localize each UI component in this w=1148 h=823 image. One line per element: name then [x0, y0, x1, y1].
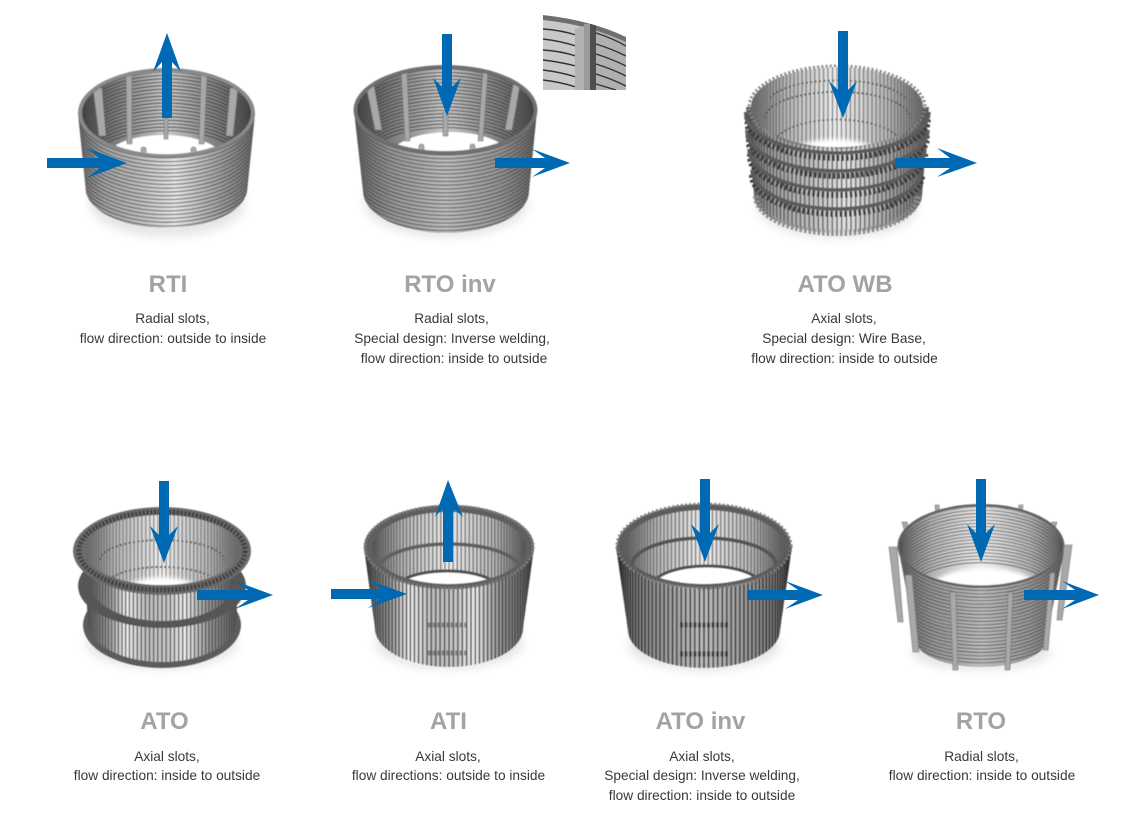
description: ATO inv: Special design: Inverse welding,	[604, 768, 800, 783]
panel: ATO	[72, 481, 273, 780]
description: ATO inv: flow direction: inside to outside	[609, 788, 795, 803]
arrow: flow out to right	[197, 581, 273, 609]
heading: RTI: RTI	[149, 271, 187, 298]
arrow: flow out to right	[747, 581, 823, 609]
heading: ATO: ATO	[140, 708, 189, 735]
arrow: flow in from left	[47, 148, 127, 178]
heading: RTO: RTO	[956, 708, 1006, 735]
arrow: flow out to right	[495, 149, 570, 177]
description: RTI: Radial slots,	[135, 311, 210, 326]
description: ATO WB: Axial slots,	[811, 311, 877, 326]
RTO inv wire cylinder	[354, 65, 538, 238]
description: ATI: flow directions: outside to inside	[352, 768, 545, 783]
description: ATO inv	[604, 749, 800, 803]
arrow: flow out to right	[895, 148, 977, 177]
description: RTO: Radial slots,	[944, 749, 1019, 764]
arrow: flow in downward	[150, 481, 178, 563]
panel: ATO inv	[604, 479, 823, 800]
description: ATO WB	[751, 311, 938, 366]
panel: RTI	[47, 33, 266, 346]
RTO wire cylinder with outer support bars	[889, 504, 1072, 670]
ATO inv slotted cylinder	[615, 502, 794, 673]
heading: ATO inv: ATO inv	[656, 708, 746, 735]
heading: ATI: ATI	[430, 708, 467, 735]
panel: RTO inv	[354, 15, 626, 366]
arrow: flow in downward	[691, 479, 719, 562]
description: ATO: flow direction: inside to outside	[74, 768, 260, 783]
description: ATI	[352, 749, 545, 783]
description: ATO WB: Special design: Wire Base,	[762, 331, 926, 346]
description: ATO WB: flow direction: inside to outside	[751, 351, 938, 366]
description: RTO inv: Special design: Inverse welding,	[354, 331, 550, 346]
description: RTI	[80, 311, 266, 346]
panel: ATO WB	[743, 31, 977, 363]
RTI wire cylinder	[78, 68, 256, 241]
arrow: flow in from left	[331, 580, 407, 608]
description: ATI: Axial slots,	[415, 749, 481, 764]
description: RTO inv: Radial slots,	[414, 311, 489, 326]
arrow: flow in downward	[433, 34, 461, 116]
arrow: flow out upward	[153, 33, 181, 118]
description: RTO inv: flow direction: inside to outside	[361, 351, 547, 366]
arrow: flow out upward	[435, 480, 463, 562]
description: RTI: flow direction: outside to inside	[80, 331, 266, 346]
description: RTO inv	[354, 311, 550, 366]
arrow: flow in downward	[967, 479, 995, 562]
inset: inverse welding detail	[543, 15, 626, 90]
description: ATO	[74, 749, 260, 783]
ATI slotted cylinder	[362, 504, 536, 671]
description: ATO: Axial slots,	[134, 749, 200, 764]
description: RTO	[889, 749, 1075, 783]
panel: ATI	[331, 480, 544, 780]
description: RTO: flow direction: inside to outside	[889, 768, 1075, 783]
ATO slotted cylinder with flanges	[72, 506, 252, 671]
panel: RTO	[889, 479, 1099, 783]
heading: RTO inv: RTO inv	[404, 271, 496, 298]
arrow: flow out to right	[1024, 581, 1099, 609]
arrow: flow in downward	[829, 31, 857, 118]
ATO WB slotted cylinder on wire base	[743, 64, 932, 240]
description: ATO inv: Axial slots,	[669, 749, 735, 764]
heading: ATO WB: ATO WB	[797, 271, 893, 298]
